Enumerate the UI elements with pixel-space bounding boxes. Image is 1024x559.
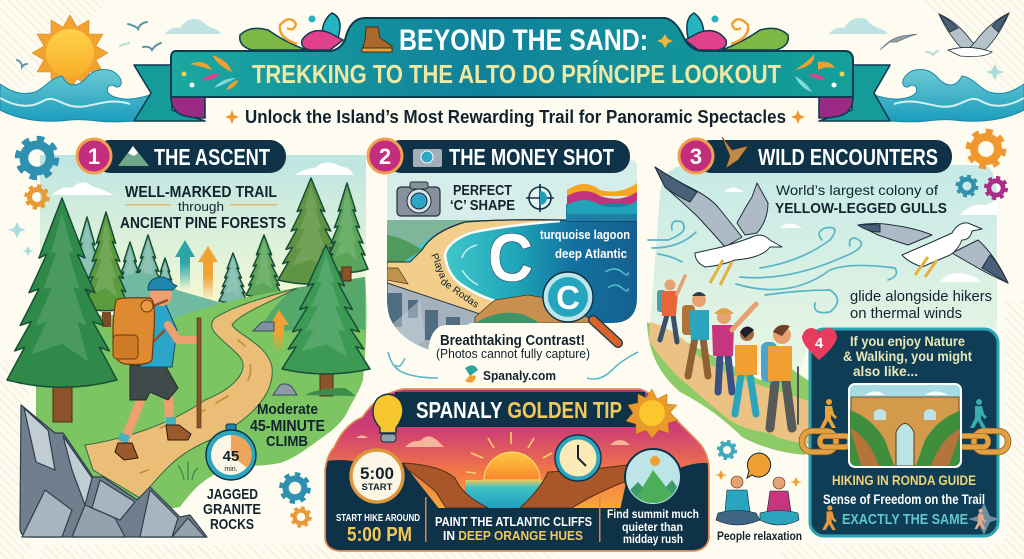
title line 2: TREKKING TO THE ALTO DO PRÍNCIPE LOOKOUT bbox=[252, 59, 781, 89]
chain left bbox=[802, 431, 850, 452]
small rocks bbox=[253, 322, 297, 395]
heading: the ascent bbox=[77, 139, 286, 173]
text: contrast: (Photos cannot fully capture) bbox=[436, 347, 590, 361]
icon: walker gold bbox=[820, 399, 837, 428]
icon: heart bbox=[802, 328, 837, 360]
clock: 5:00 start: START bbox=[362, 482, 393, 493]
text: freedom: Sense of Freedom on the Trail bbox=[823, 492, 985, 507]
panel: the money shot bbox=[387, 160, 638, 392]
teal hill bbox=[115, 273, 232, 330]
text: start: START HIKE AROUND bbox=[336, 512, 420, 524]
clouds bbox=[164, 18, 888, 34]
left pines bbox=[7, 198, 129, 422]
text: lagoon and ocean bbox=[540, 228, 630, 261]
text: colony bbox=[775, 182, 947, 217]
header bar bbox=[395, 392, 645, 427]
text: trail description: through bbox=[178, 199, 224, 214]
divider bbox=[599, 497, 600, 542]
icon: sun bbox=[626, 389, 678, 438]
person left bbox=[716, 476, 760, 525]
text: lagoon and ocean: deep Atlantic bbox=[555, 247, 627, 261]
left headland bbox=[387, 268, 408, 284]
hiker a bbox=[657, 276, 685, 342]
arrows bbox=[175, 240, 289, 352]
subtitle: Unlock the Island’s Most Rewarding Trail for Panoramic Spectacles bbox=[245, 107, 786, 127]
text: paint: IN DEEP ORANGE HUES bbox=[443, 528, 583, 543]
icon: hiking boot bbox=[362, 27, 392, 52]
sparkles bbox=[715, 470, 802, 487]
gull right bbox=[858, 223, 1008, 283]
callout bbox=[428, 325, 600, 392]
sunset scene bbox=[326, 388, 708, 552]
text: exactly the same: EXACTLY THE SAME bbox=[842, 511, 968, 528]
text: paint: PAINT THE ATLANTIC CLIFFS bbox=[435, 514, 592, 529]
text: start bbox=[336, 512, 420, 546]
ground bbox=[36, 277, 366, 530]
text: trail description: ANCIENT PINE FORESTS bbox=[120, 215, 286, 232]
panel: wild encounters bbox=[647, 165, 1008, 455]
text: if you enjoy: also like... bbox=[853, 363, 918, 379]
stopwatch: 45 bbox=[223, 448, 239, 465]
beach bbox=[387, 220, 560, 314]
text: playa de rodas: Playa bbox=[428, 252, 448, 281]
confetti bbox=[182, 54, 844, 92]
panel: you might also like bbox=[802, 328, 1008, 536]
divider bbox=[425, 497, 426, 542]
text: trail description: WELL-MARKED TRAIL bbox=[125, 184, 277, 201]
heading: the money shot bbox=[368, 139, 630, 173]
text: ronda guide: HIKING IN RONDA GUIDE bbox=[832, 472, 976, 488]
mountain circle bbox=[624, 448, 681, 504]
chain right bbox=[958, 431, 1008, 452]
clock icon bbox=[555, 435, 601, 481]
hikers bbox=[657, 276, 798, 428]
stopwatch bbox=[206, 424, 256, 480]
ribbon folds bbox=[171, 97, 205, 118]
sky bbox=[387, 160, 637, 222]
divider bbox=[566, 220, 637, 222]
speech bubble bbox=[747, 453, 771, 478]
icon: walker small bbox=[822, 505, 837, 530]
sparkles bbox=[8, 64, 1004, 256]
text: if you enjoy bbox=[843, 333, 972, 379]
sea ripples bbox=[605, 269, 628, 291]
text: perfect c shape: ‘C’ SHAPE bbox=[450, 197, 515, 214]
right headland bbox=[475, 295, 600, 323]
text: perfect c shape: PERFECT bbox=[453, 182, 512, 199]
ribbon tail left bbox=[134, 65, 205, 121]
heading: the money shot: 2 bbox=[379, 144, 391, 169]
trail dashes bbox=[120, 340, 251, 473]
people relaxation bbox=[715, 453, 802, 543]
text: summit: quieter than bbox=[622, 520, 683, 534]
text: if you enjoy: If you enjoy Nature bbox=[850, 333, 965, 349]
colour bands bbox=[566, 183, 637, 221]
right pines bbox=[278, 178, 370, 396]
wind swirls bbox=[648, 221, 896, 313]
text: rocks: ROCKS bbox=[210, 516, 254, 533]
hills bbox=[387, 220, 480, 246]
text: start: 5:00 PM bbox=[347, 524, 412, 546]
heading: the ascent: THE ASCENT bbox=[154, 144, 270, 170]
text: contrast bbox=[436, 333, 590, 361]
map bbox=[387, 220, 637, 355]
heading: wild encounters: 3 bbox=[690, 144, 702, 169]
grass patch bbox=[178, 462, 198, 480]
text: contrast: Breathtaking Contrast! bbox=[440, 333, 585, 349]
hill bbox=[647, 322, 812, 455]
big letter c: C bbox=[488, 220, 533, 296]
wave left bbox=[0, 70, 150, 122]
hiker b bbox=[682, 292, 709, 376]
text: paint bbox=[435, 514, 592, 543]
title ribbon bbox=[134, 13, 890, 121]
panel: golden tip bbox=[326, 388, 708, 552]
clock: 5:00 start: 5:00 bbox=[360, 464, 394, 483]
wave right bbox=[874, 70, 1024, 122]
clock: 5:00 start bbox=[351, 450, 403, 502]
text: summit bbox=[607, 507, 699, 546]
squiggles bbox=[388, 352, 638, 379]
text: climb: Moderate bbox=[257, 401, 318, 418]
hiker e bbox=[761, 325, 798, 428]
background pines bbox=[68, 217, 247, 308]
text: climb bbox=[250, 401, 325, 450]
heading: the money shot: THE MONEY SHOT bbox=[449, 144, 614, 170]
magnifier bbox=[543, 272, 618, 343]
text: summit: Find summit much bbox=[607, 507, 699, 521]
magnifier: C bbox=[556, 279, 580, 316]
icon: sparkle bbox=[657, 34, 673, 48]
ribbon tail right bbox=[819, 65, 890, 121]
person right bbox=[760, 477, 799, 525]
icon: sun bbox=[32, 15, 108, 91]
text: perfect c shape bbox=[450, 182, 515, 214]
ocean bbox=[387, 220, 637, 355]
icon: camera bbox=[397, 182, 440, 216]
small birds bbox=[17, 22, 938, 67]
icon: lightbulb bbox=[373, 394, 403, 442]
text: glide bbox=[850, 288, 992, 322]
text: climb: 45-MINUTE bbox=[250, 418, 325, 435]
trail bbox=[85, 288, 297, 498]
icon: heart: 4 bbox=[815, 335, 824, 352]
text: climb: CLIMB bbox=[266, 433, 308, 450]
text: if you enjoy: & Walking, you might bbox=[843, 348, 972, 364]
gull large bbox=[655, 167, 782, 285]
sky bbox=[40, 155, 366, 305]
text: lagoon and ocean: turquoise lagoon bbox=[540, 228, 630, 242]
title line 1: BEYOND THE SAND: bbox=[399, 24, 648, 57]
logo: Spanaly.com bbox=[483, 368, 556, 383]
heading: the ascent: 1 bbox=[88, 144, 100, 169]
hiker d bbox=[735, 326, 757, 414]
sky clouds bbox=[724, 188, 997, 282]
text: playa de rodas bbox=[428, 252, 481, 311]
banner body bbox=[171, 18, 853, 97]
icon: walker teal bbox=[970, 399, 987, 428]
logo bbox=[465, 365, 556, 383]
clouds bbox=[52, 162, 353, 195]
text: glide: glide alongside hikers bbox=[850, 288, 992, 305]
stopwatch: min. bbox=[224, 466, 238, 473]
photo: ronda bridge bbox=[849, 384, 962, 468]
text: colony: World’s largest colony of bbox=[776, 182, 938, 198]
panel: the ascent bbox=[7, 155, 370, 537]
small gull bbox=[880, 34, 917, 50]
decorative swooshes bbox=[240, 13, 788, 50]
text: rocks: JAGGED bbox=[207, 486, 258, 503]
gull top right bbox=[939, 13, 1009, 56]
text: glide: on thermal winds bbox=[850, 305, 962, 322]
rocks bbox=[20, 405, 207, 537]
heading: wild encounters bbox=[679, 137, 952, 173]
text: rocks bbox=[203, 486, 261, 533]
bridge bbox=[387, 283, 480, 355]
icon: sparkle hiker bbox=[968, 503, 1000, 535]
outer shape bbox=[326, 390, 708, 550]
hiker bbox=[113, 277, 201, 460]
lagoon highlights bbox=[462, 245, 478, 285]
hiker c bbox=[712, 304, 756, 392]
label: People relaxation bbox=[717, 529, 802, 543]
text: colony: YELLOW-LEGGED GULLS bbox=[775, 200, 947, 217]
heading: wild encounters: WILD ENCOUNTERS bbox=[758, 144, 938, 170]
icon: target bbox=[526, 184, 554, 212]
text: trail description bbox=[120, 184, 286, 232]
heading: golden tip: SPANALY GOLDEN TIP bbox=[416, 397, 622, 423]
sky bbox=[650, 165, 997, 372]
text: summit: midday rush bbox=[623, 532, 683, 546]
text: rocks: GRANITE bbox=[203, 501, 261, 518]
green pine bbox=[246, 235, 282, 300]
gears bbox=[18, 131, 1006, 526]
text: playa de rodas: de Rodas bbox=[438, 276, 481, 311]
